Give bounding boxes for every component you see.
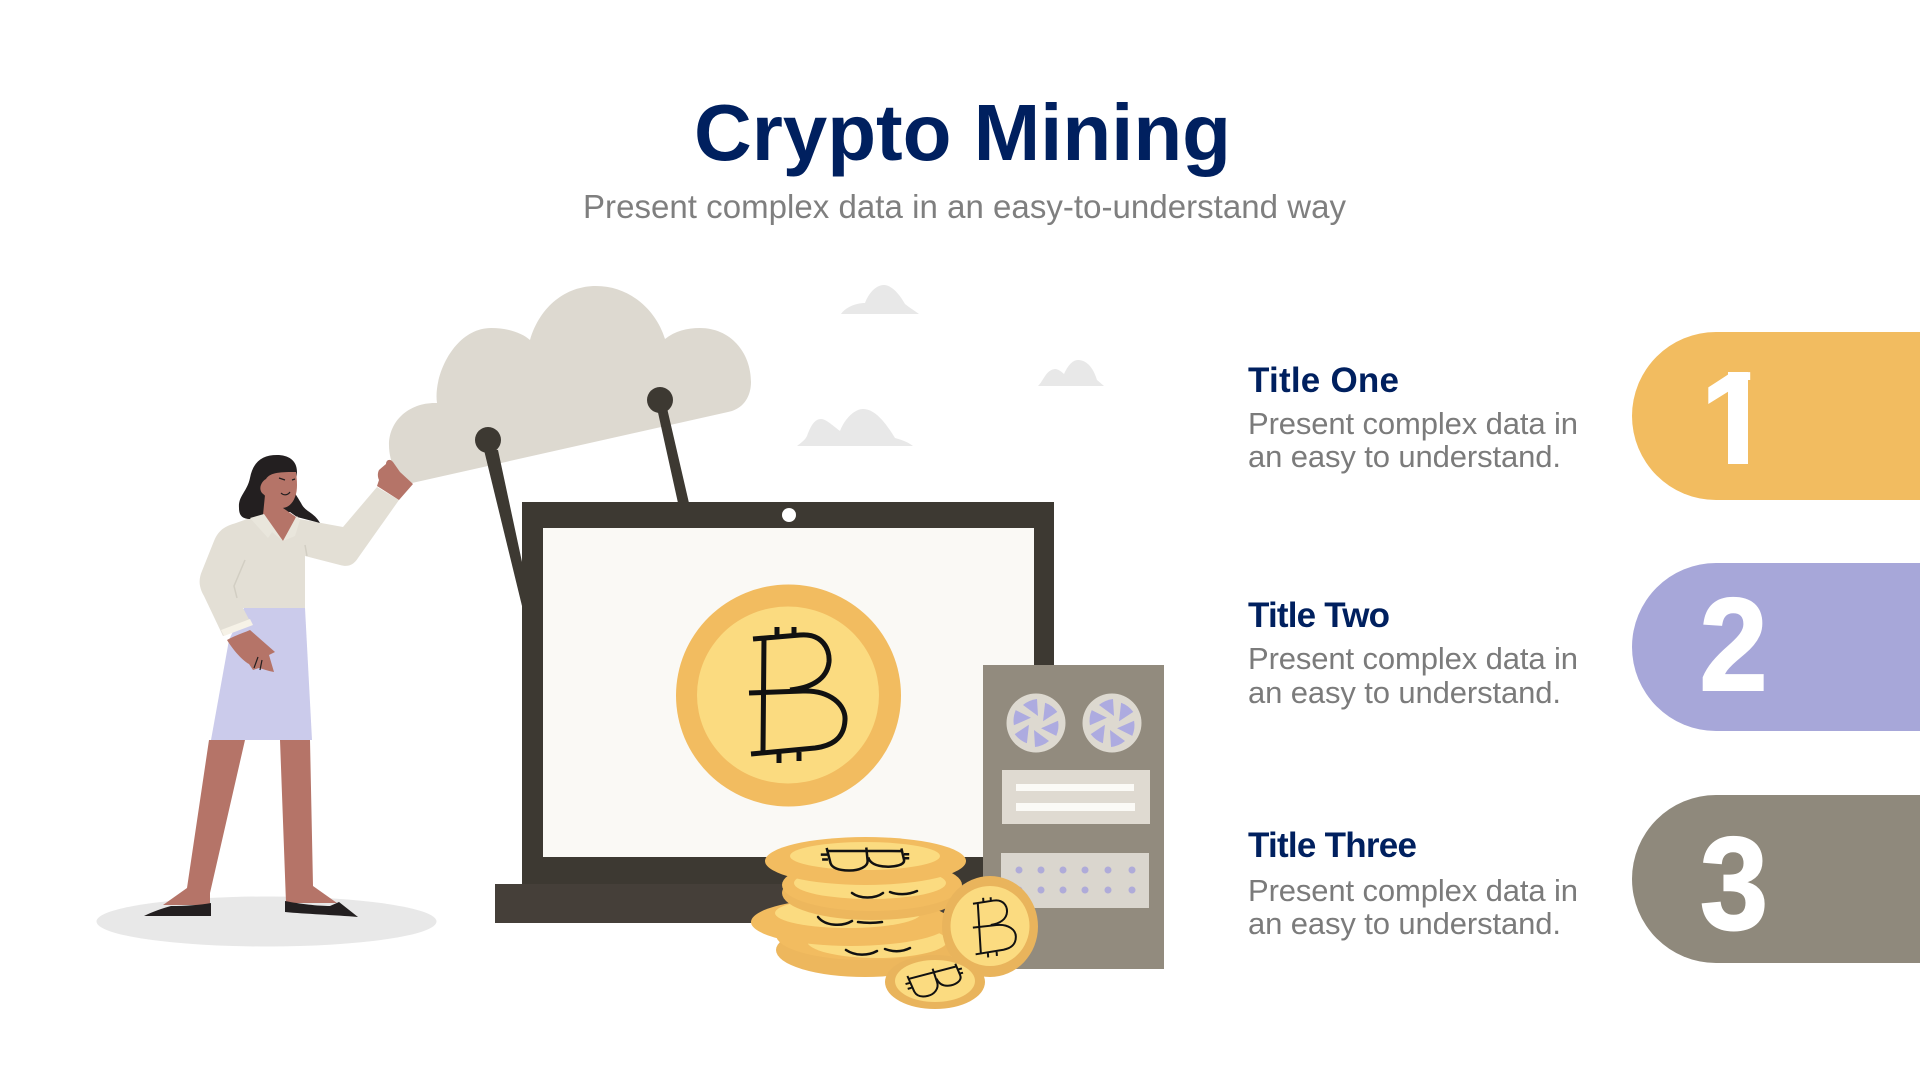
cuff [221, 619, 253, 636]
coin stack [751, 837, 966, 977]
number 2: 2 [1699, 572, 1768, 719]
fan left [1006, 694, 1066, 752]
neck [263, 495, 296, 541]
collar [250, 514, 300, 541]
title one: Title One [1248, 361, 1399, 400]
item 3 [1248, 795, 1920, 963]
number 1: 1 [1700, 345, 1774, 492]
face [260, 472, 297, 508]
hair [239, 455, 320, 523]
item 1 [1248, 332, 1920, 500]
title: Crypto Mining [694, 88, 1231, 177]
lower hand [227, 630, 275, 672]
fan right [1082, 694, 1142, 752]
server panel with bars [1002, 770, 1150, 824]
antennas [475, 387, 689, 606]
description one [1248, 406, 1578, 474]
title three: Title Three [1248, 826, 1417, 865]
big bitcoin coin [676, 584, 901, 806]
raised hand [377, 460, 413, 500]
description one: Present complex data in [1248, 406, 1578, 441]
pill 3 [1632, 795, 1920, 963]
shoes [144, 901, 358, 917]
background clouds [797, 285, 1104, 446]
description three: an easy to understand. [1248, 906, 1561, 941]
description two: Present complex data in [1248, 641, 1578, 676]
skirt [211, 608, 312, 740]
description one: an easy to understand. [1248, 439, 1561, 474]
small coin [885, 955, 985, 1009]
bitcoin symbol [749, 627, 845, 763]
flat bitcoin symbol [821, 847, 909, 871]
title two: Title Two [1248, 596, 1390, 635]
blouse [200, 487, 399, 636]
large cloud [389, 286, 751, 483]
description two: an easy to understand. [1248, 675, 1561, 710]
pill 2 [1632, 563, 1920, 731]
pill 1 [1632, 332, 1920, 500]
item 2 [1248, 563, 1920, 731]
legs [163, 740, 337, 905]
medium coin [942, 876, 1038, 977]
woman figure [144, 455, 413, 917]
description two [1248, 641, 1578, 710]
description three [1248, 873, 1578, 941]
ground shadow [96, 896, 436, 946]
subtitle: Present complex data in an easy-to-understand way [583, 188, 1346, 225]
server panel with dots [1001, 853, 1149, 908]
description three: Present complex data in [1248, 873, 1578, 908]
number 3: 3 [1700, 811, 1768, 958]
laptop [495, 502, 1054, 923]
server tower [983, 665, 1164, 969]
